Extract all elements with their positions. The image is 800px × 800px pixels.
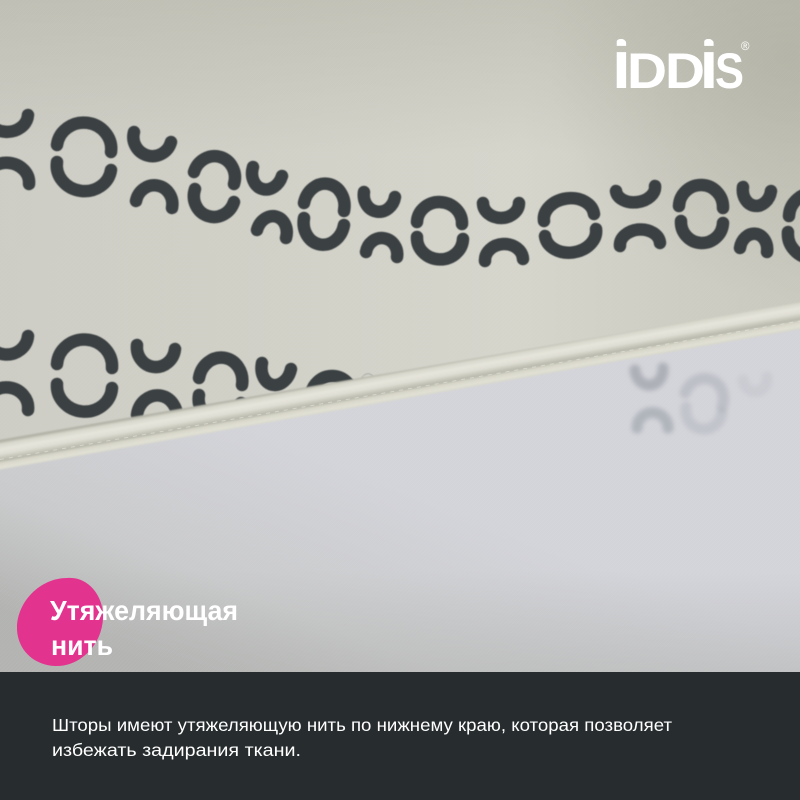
wordmark: S bbox=[715, 43, 744, 99]
weighted hem seam bbox=[0, 302, 800, 470]
wordmark: D bbox=[665, 43, 705, 99]
description text bbox=[52, 715, 672, 760]
stitch line bbox=[0, 321, 800, 460]
wordmark: i bbox=[700, 27, 718, 103]
ghost pattern showing through the panel bbox=[635, 368, 767, 429]
fold shadow on the right bbox=[653, 0, 800, 204]
heading line 2: нить bbox=[51, 630, 113, 661]
twill texture on lower panel bbox=[0, 325, 800, 680]
wordmark: i bbox=[612, 27, 631, 103]
heading bbox=[50, 595, 238, 661]
registered mark: ® bbox=[741, 41, 750, 53]
description line 1: Шторы имеют утяжеляющую нить по нижнему краю, которая позволяет bbox=[52, 715, 672, 735]
bottom dark band bbox=[0, 672, 800, 800]
lower panel shading at the bottom bbox=[332, 608, 800, 672]
pattern row 1: rings and arcs bbox=[0, 112, 800, 261]
heading line 1: Утяжеляющая bbox=[50, 595, 238, 626]
twill texture on upper cloth bbox=[0, 0, 800, 480]
hem rope and lip bbox=[0, 302, 800, 470]
logo: IDDIS bbox=[616, 39, 750, 88]
pink blob accent bbox=[17, 578, 103, 666]
wordmark: D bbox=[627, 43, 667, 99]
description line 2: избежать задирания ткани. bbox=[52, 740, 301, 760]
upper patterned cloth bbox=[0, 0, 800, 480]
pattern row 2: rings and arcs above the hem bbox=[0, 332, 368, 420]
shading at top of cloth bbox=[0, 0, 742, 92]
lower plain panel bbox=[0, 325, 800, 680]
